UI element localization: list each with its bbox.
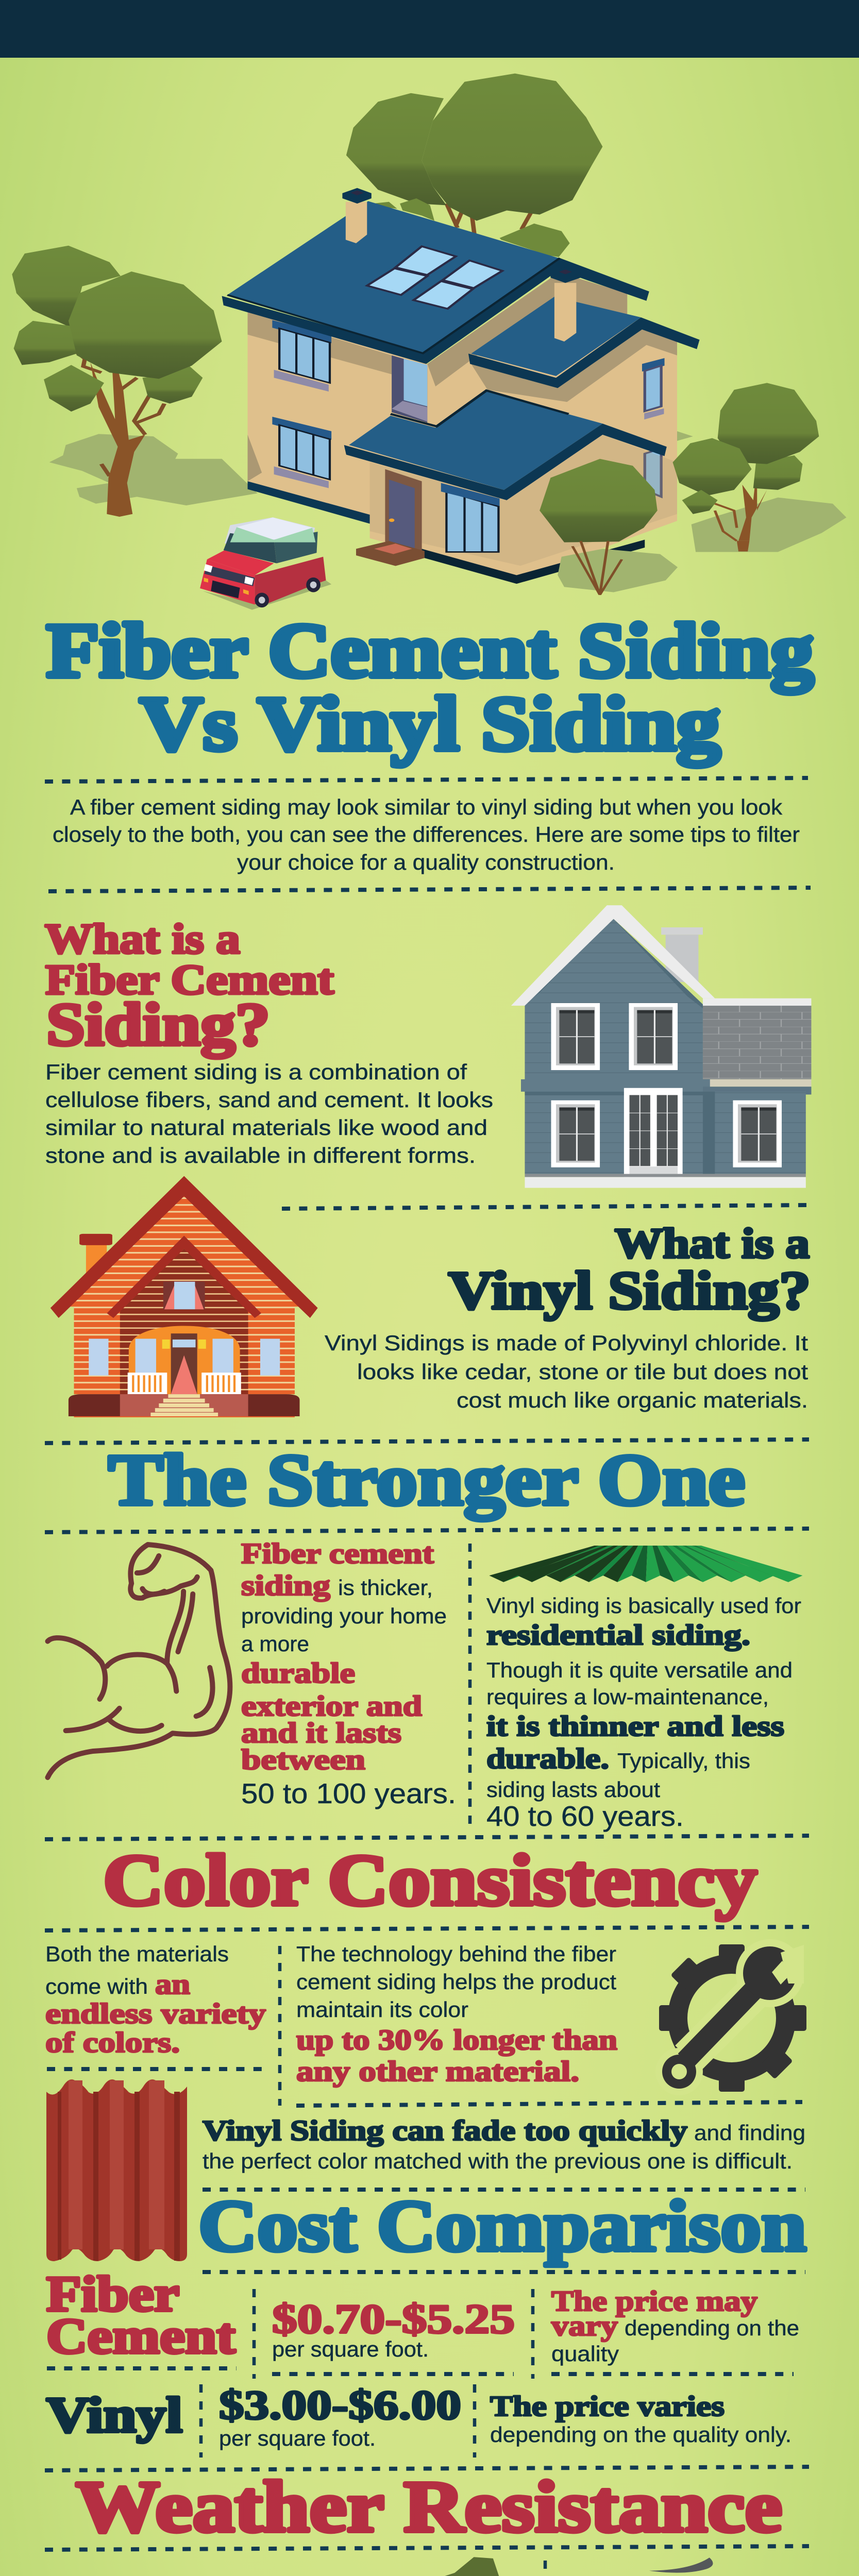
description: [45, 1060, 493, 1167]
note: vinyl price: The price varies: [490, 2391, 725, 2422]
price: fiber cement: [272, 2297, 515, 2361]
description: looks like cedar, stone or tile but does not: [357, 1360, 808, 1384]
panel: what is vinyl siding: [50, 1176, 811, 1417]
title: [46, 608, 814, 767]
technology text: cement siding helps the product: [296, 1970, 616, 1994]
heading: Vinyl Siding?: [448, 1260, 811, 1320]
heading: Siding?: [46, 991, 270, 1058]
both materials text: [45, 1942, 266, 2059]
back trees: [346, 74, 602, 257]
description: [325, 1331, 808, 1412]
hero illustration: isometric house, trees and car: [12, 74, 846, 610]
fiber cement text: between: [241, 1744, 365, 1776]
vinyl text: residential siding.: [486, 1619, 750, 1651]
fiber cement text: and it lasts: [241, 1717, 401, 1749]
both materials text: come with: [45, 1974, 148, 1998]
panel: weather resistance: [45, 2557, 811, 2576]
technology text: [296, 1942, 617, 2088]
panel: what is fiber cement siding: [45, 905, 811, 1188]
both materials text: of colors.: [45, 2027, 180, 2059]
chimneys: [342, 188, 372, 243]
label: fiber cement: Cement: [46, 2309, 235, 2364]
intro text: your choice for a quality construction.: [237, 850, 615, 874]
icon: green corrugated siding: [489, 1546, 802, 1582]
upper left window: [272, 320, 331, 392]
fiber cement text: [241, 1538, 456, 1809]
vinyl text: it is thinner and less: [486, 1710, 784, 1742]
both materials text: Both the materials: [45, 1942, 229, 1966]
fiber cement text: 50 to 100 years.: [241, 1777, 456, 1809]
panel: the stronger one: [47, 1538, 802, 1832]
price: fiber cement: per square foot.: [272, 2337, 429, 2361]
note: vinyl price: depending on the quality only.: [490, 2422, 791, 2447]
vinyl text: [486, 1594, 801, 1832]
vinyl text: Vinyl siding is basically used for: [486, 1594, 801, 1618]
note: fiber cement price: [551, 2285, 799, 2366]
description: cellulose fibers, sand and cement. It looks: [45, 1088, 493, 1112]
front tree: [540, 459, 658, 543]
note: fiber cement price: depending on the: [625, 2316, 799, 2340]
technology text: any other material.: [296, 2056, 579, 2088]
heading: the stronger one: The Stronger One: [108, 1439, 745, 1520]
intro text: closely to the both, you can see the differences. Here are some tips to filter: [53, 822, 800, 846]
note: fiber cement price: vary: [551, 2310, 618, 2342]
description: cost much like organic materials.: [457, 1388, 808, 1412]
fiber cement text: siding: [241, 1570, 330, 1602]
fiber cement text: is thicker,: [338, 1575, 433, 1600]
fiber cement text: Fiber cement: [241, 1538, 434, 1570]
both materials text: an: [155, 1969, 190, 2001]
fiber cement text: providing your home: [241, 1604, 447, 1628]
vinyl text: requires a low-maintenance,: [486, 1685, 769, 1709]
heading: What is a: [615, 1219, 810, 1267]
icon: faded red siding: [46, 2079, 187, 2261]
price: vinyl: [219, 2383, 461, 2450]
note: fiber cement price: quality: [551, 2342, 619, 2366]
second roof: [468, 267, 700, 388]
main roof: [222, 201, 649, 364]
icon: teal house with bending tree: [250, 2557, 525, 2576]
vinyl text: 40 to 60 years.: [486, 1800, 684, 1832]
vinyl fading text: [203, 2115, 805, 2173]
price: fiber cement: $0.70-$5.25: [272, 2297, 515, 2342]
vinyl text: durable.: [486, 1743, 609, 1775]
vinyl text: siding lasts about: [486, 1777, 660, 1802]
heading: [448, 1219, 811, 1320]
heading: weather resistance: Weather Resistance: [76, 2466, 782, 2547]
description: Fiber cement siding is a combination of: [45, 1060, 467, 1084]
price: vinyl: $3.00-$6.00: [219, 2383, 461, 2428]
title: Vs Vinyl Siding: [140, 681, 720, 767]
fiber cement text: a more: [241, 1632, 309, 1656]
house base and steps: [356, 539, 749, 595]
vinyl fading text: and finding: [694, 2121, 805, 2145]
icon: orange brick house: [50, 1176, 318, 1417]
vinyl fading text: the perfect color matched with the previous one is difficult.: [203, 2149, 793, 2173]
both materials text: endless variety: [45, 1998, 266, 2030]
vinyl text: Though it is quite versatile and: [486, 1658, 793, 1682]
label: fiber cement: Fiber: [46, 2266, 179, 2321]
technology text: maintain its color: [296, 1997, 468, 2022]
label: vinyl: Vinyl: [46, 2387, 182, 2443]
icon: storm damaged house: [563, 2557, 811, 2576]
technology text: up to 30% longer than: [296, 2024, 617, 2056]
walls: [248, 273, 677, 580]
side windows: [642, 358, 665, 497]
description: stone and is available in different forms.: [45, 1143, 476, 1167]
description: Vinyl Sidings is made of Polyvinyl chloride. It: [325, 1331, 808, 1355]
icon: blue-grey house: [511, 905, 811, 1188]
right trees: [672, 383, 819, 541]
intro text: [53, 795, 800, 874]
vinyl text: Typically, this: [617, 1749, 750, 1773]
front door and window: [370, 435, 677, 566]
price: vinyl: per square foot.: [219, 2426, 376, 2450]
note: vinyl price: [490, 2391, 791, 2447]
porch roof: [344, 391, 667, 500]
top header band: [0, 0, 859, 58]
note: fiber cement price: The price may: [551, 2285, 757, 2317]
panel: cost comparison: [46, 2266, 799, 2458]
panel: color consistency: [45, 1939, 806, 2261]
heading: color consistency: Color Consistency: [103, 1839, 757, 1921]
intro text: A fiber cement siding may look similar to vinyl siding but when you look: [70, 795, 783, 819]
heading: Fiber Cement: [45, 956, 334, 1003]
fiber cement text: exterior and: [241, 1690, 422, 1722]
title: Fiber Cement Siding: [46, 608, 814, 693]
heading: [45, 915, 334, 1058]
technology text: The technology behind the fiber: [296, 1942, 616, 1966]
heading: What is a: [45, 915, 240, 962]
left trees: [12, 246, 222, 517]
description: similar to natural materials like wood and: [45, 1115, 487, 1140]
icon: flexed arm: [47, 1545, 230, 1777]
icon: gear and wrench: [655, 1939, 806, 2095]
label: fiber cement: [46, 2266, 235, 2364]
red car: [200, 517, 331, 610]
fiber cement text: durable: [241, 1657, 355, 1689]
lower left window: [272, 417, 331, 488]
vinyl fading text: Vinyl Siding can fade too quickly: [203, 2115, 687, 2147]
heading: cost comparison: Cost Comparison: [198, 2185, 806, 2266]
